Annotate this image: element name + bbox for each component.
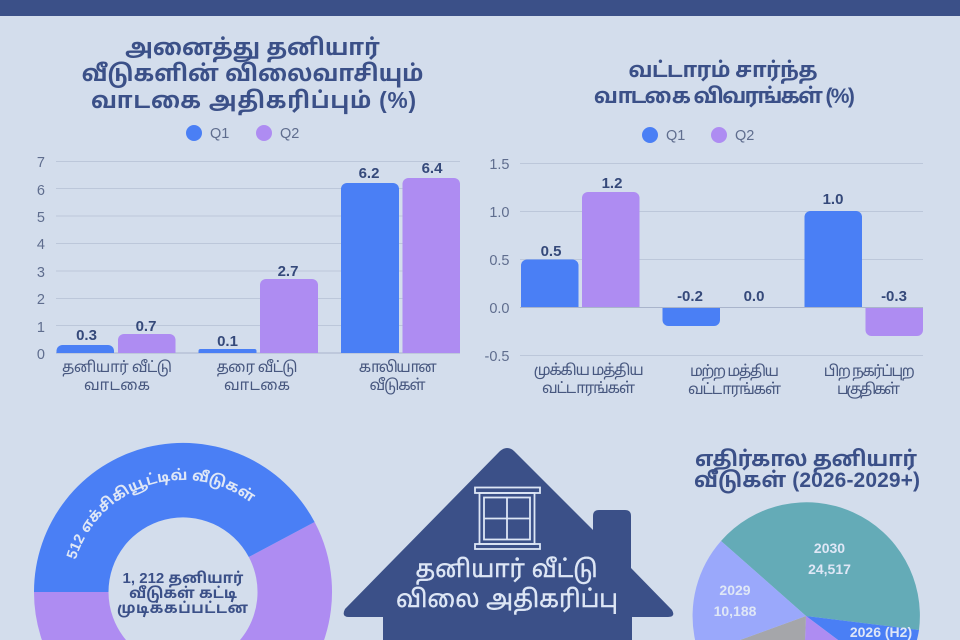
heading: left chart title: வாடகை அதிகரிப்பும் (%) xyxy=(91,87,416,115)
legend: left chart xyxy=(186,125,299,142)
legend: right chart: Q2 xyxy=(735,128,754,144)
y axis: left chart: 3 xyxy=(37,265,45,281)
heading: pie title xyxy=(694,448,920,494)
value labels: left chart: 0.3 xyxy=(76,327,97,344)
category labels: right chart: மற்ற மத்திய xyxy=(690,363,779,381)
pie labels: 2029 xyxy=(719,582,751,598)
y axis: left chart xyxy=(37,155,460,363)
donut centre text: வீடுகள் கட்டி xyxy=(129,584,237,603)
donut chart: completed private homes xyxy=(34,442,332,640)
top banner xyxy=(0,0,960,16)
bars: right chart xyxy=(520,192,923,336)
y axis: left chart: 6 xyxy=(37,183,45,199)
category labels: right chart: வட்டாரங்கள் xyxy=(688,381,781,398)
value labels: left chart: 6.4 xyxy=(422,160,443,177)
category labels: right chart: வட்டாரங்கள் xyxy=(542,380,635,397)
y axis: left chart: 0 xyxy=(37,347,45,363)
value labels: left chart: 6.2 xyxy=(359,165,379,182)
heading: left chart title: வீடுகளின் விலைவாசியும் xyxy=(82,60,423,88)
legend: right chart: Q1 xyxy=(666,128,685,144)
pie labels: 2030 xyxy=(814,540,845,556)
y axis: right chart: 0.5 xyxy=(489,253,510,269)
value labels: right chart: -0.3 xyxy=(881,288,907,305)
heading: right chart title: வட்டாரம் சார்ந்த xyxy=(628,59,818,84)
pie slice: grey xyxy=(740,616,806,640)
value labels: left chart: 0.1 xyxy=(217,333,238,350)
house title: விலை அதிகரிப்பு xyxy=(396,586,618,615)
pie labels: 2026 (H2) xyxy=(850,624,912,640)
value labels: left chart: 0.7 xyxy=(136,318,156,335)
category labels: left chart: வாடகை xyxy=(84,377,150,394)
pie labels xyxy=(714,540,912,640)
value labels: right chart: 0.5 xyxy=(541,243,561,260)
panel: future private homes pie xyxy=(693,448,920,640)
donut centre text: முடிக்கப்பட்டன xyxy=(117,600,249,618)
category labels: right chart: பகுதிகள் xyxy=(837,381,900,399)
value labels: right chart xyxy=(541,175,907,305)
donut centre text xyxy=(117,570,249,618)
donut centre text: 1, 212 தனியார் xyxy=(123,570,244,588)
pie chart xyxy=(693,502,920,640)
donut segment: purple right xyxy=(240,522,332,640)
category labels: left chart: காலியான xyxy=(359,359,437,376)
panel: price and rent increase chart xyxy=(37,34,460,395)
y axis: left chart: 4 xyxy=(37,237,45,253)
value labels: left chart: 2.7 xyxy=(278,263,298,280)
y axis: left chart: 2 xyxy=(37,292,45,308)
donut segment: purple left xyxy=(34,592,126,640)
category labels: left chart: தனியார் வீட்டு xyxy=(62,359,172,377)
category labels: right chart: முக்கிய மத்திய xyxy=(534,362,644,380)
legend: left chart: Q1 xyxy=(210,126,229,142)
category labels: left chart xyxy=(62,359,437,395)
heading: left chart title xyxy=(82,34,423,115)
legend: right chart xyxy=(642,127,754,144)
y axis: right chart: 1.0 xyxy=(489,205,510,221)
y axis: right chart: 0.0 xyxy=(489,301,510,317)
value labels: right chart: 1.0 xyxy=(823,191,843,208)
house title: தனியார் வீட்டு xyxy=(415,556,598,585)
pie slice: 2029 xyxy=(693,541,806,640)
value labels: left chart xyxy=(76,160,443,350)
bars: left chart xyxy=(56,178,460,353)
legend: left chart: Q2 xyxy=(280,126,299,142)
category labels: left chart: வீடுகள் xyxy=(370,377,426,395)
donut segment: executive homes xyxy=(34,443,315,592)
pie labels: 10,188 xyxy=(714,603,757,619)
house title xyxy=(396,556,618,615)
y axis: left chart: 5 xyxy=(37,210,45,226)
pie labels: 24,517 xyxy=(808,561,851,577)
y axis: left chart: 1 xyxy=(37,320,45,336)
house graphic xyxy=(344,448,673,640)
heading: left chart title: அனைத்து தனியார் xyxy=(125,34,380,62)
y axis: right chart xyxy=(484,157,923,365)
value labels: right chart: 0.0 xyxy=(744,288,764,305)
house shape xyxy=(344,448,673,640)
category labels: right chart xyxy=(534,362,915,399)
pie slice: 2030 xyxy=(721,502,920,630)
category labels: right chart: பிற நகர்ப்புற xyxy=(824,363,915,381)
curved donut label: 512 எக்சிகியூட்டிவ் வீடுகள் xyxy=(66,468,256,559)
heading: right chart title: வாடகை விவரங்கள் (%) xyxy=(594,85,855,108)
y axis: right chart: 1.5 xyxy=(489,157,510,173)
y axis: right chart: -0.5 xyxy=(484,349,510,365)
heading: pie title: வீடுகள் (2026-2029+) xyxy=(694,469,920,494)
heading: pie title: எதிர்கால தனியார் xyxy=(695,448,917,473)
panel: regional rent chart xyxy=(484,59,923,399)
category labels: left chart: வாடகை xyxy=(224,377,290,394)
y axis: left chart: 7 xyxy=(37,155,45,171)
value labels: right chart: 1.2 xyxy=(602,175,622,192)
pie slice: 2026 H2 xyxy=(806,616,919,640)
category labels: left chart: தரை வீட்டு xyxy=(216,359,298,377)
icon: window xyxy=(475,488,540,549)
heading: right chart title xyxy=(594,59,855,108)
pie slice: purple xyxy=(805,616,838,640)
value labels: right chart: -0.2 xyxy=(677,288,703,305)
